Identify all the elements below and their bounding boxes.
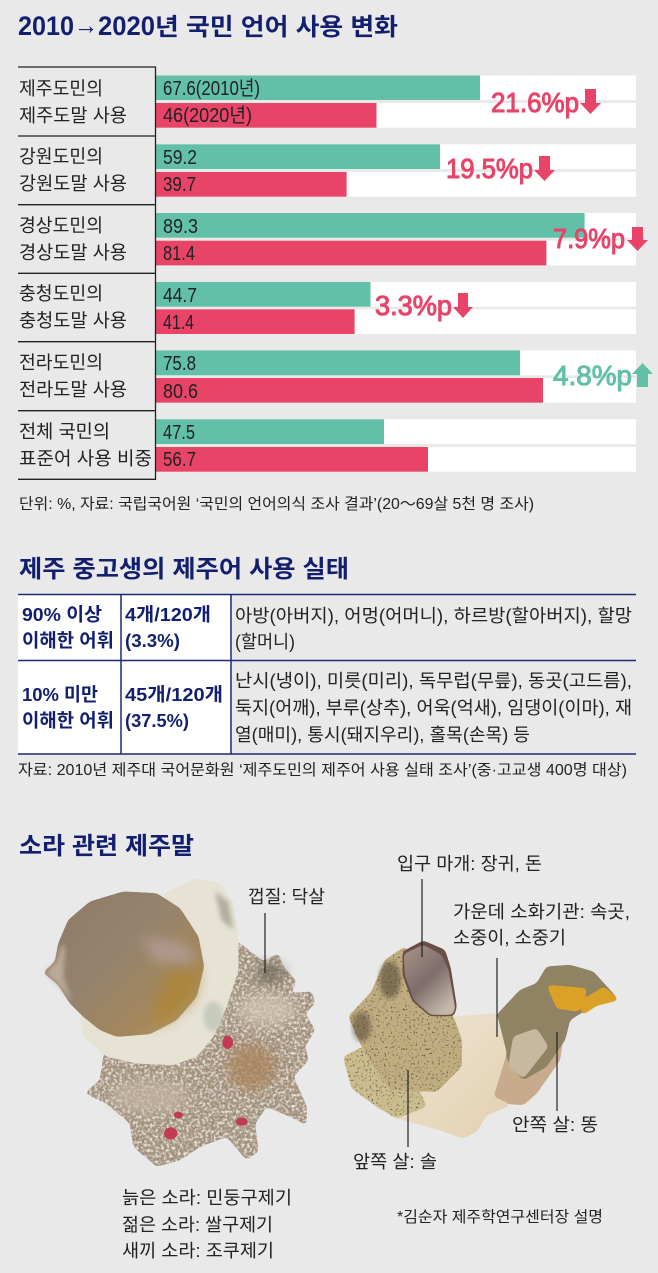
shell dark spines	[256, 963, 284, 983]
row labels: 전체 국민의	[19, 421, 110, 442]
gland piece	[497, 965, 618, 1080]
row: under 10%: 이해한 어휘	[22, 710, 114, 731]
label: front flesh: 앞쪽 살: 솔	[353, 1152, 437, 1172]
bar values: 75.8	[163, 353, 196, 375]
title: language use change: →	[74, 10, 98, 40]
red bars: 2020	[156, 103, 546, 472]
title: language use change: 2020	[98, 11, 155, 41]
title: language use change: 년 국민 언어 사용 변화	[155, 14, 398, 41]
label: shell	[248, 887, 325, 973]
bar track backgrounds	[156, 76, 636, 472]
bar values: 80.6	[163, 381, 198, 403]
gland orange	[547, 985, 619, 1017]
row: under 10%: 10% 미만	[22, 684, 98, 705]
label: digestive organ: 가운데 소화기관: 속곳,	[453, 902, 630, 922]
bar values: 81.4	[163, 243, 195, 265]
bar values: 59.2	[163, 147, 197, 169]
panel: bar chart	[18, 66, 653, 480]
bar values: 39.7	[163, 174, 196, 196]
label: inner flesh: 안쪽 살: 똥	[512, 1115, 598, 1135]
shell lip shade	[215, 892, 233, 930]
shell iridescence	[140, 937, 197, 963]
bar values: 44.7	[163, 285, 197, 307]
heading: conch words: 소라 관련 제주말	[19, 833, 194, 860]
shell inner glow	[150, 970, 200, 1027]
change callout: Jeolla: 4.8%p	[553, 360, 632, 391]
row: under 10%: 난시(냉이), 미릇(미리), 독무럽(무릎), 동곳(고드름),	[235, 671, 632, 691]
dark speckle left	[352, 1012, 371, 1042]
operculum inner	[404, 945, 455, 1015]
row: 90% or more: 아방(아버지), 어멍(어머니), 하르방(할아버지), 할망	[235, 606, 632, 626]
row: 90% or more: (할머니)	[235, 632, 295, 652]
shell light crust	[237, 993, 297, 1027]
shell pale left rim	[45, 945, 72, 1002]
change callout: Gangwon: 19.5%p	[446, 153, 533, 184]
dark speckle top	[379, 962, 401, 998]
row labels: 제주도말 사용	[19, 105, 127, 126]
row labels: 강원도말 사용	[19, 173, 127, 194]
row: under 10%: 둑지(어깨), 부루(상추), 어욱(억새), 임댕이(이마), 재	[235, 698, 632, 718]
title: language use change	[18, 10, 398, 41]
foot	[343, 1047, 427, 1118]
label: inner flesh	[512, 1032, 598, 1135]
row: 90% or more: (3.3%)	[125, 630, 180, 651]
row: 90% or more: 4개/120개	[125, 604, 211, 625]
row: under 10%: 열(매미), 통시(돼지우리), 홀목(손목) 등	[235, 725, 530, 745]
row labels: 제주도민의	[19, 78, 103, 99]
green bars: 2010	[156, 76, 585, 444]
illustration: conch flesh	[343, 941, 619, 1138]
bar values	[163, 77, 260, 471]
bar values: 47.5	[163, 422, 195, 444]
row labels: 경상도민의	[19, 215, 103, 236]
label: front flesh	[353, 1070, 437, 1172]
label: conch ages: 새끼 소라: 조쿠제기	[122, 1241, 274, 1261]
heading: Jeju students: 제주 중고생의 제주어 사용 실태	[19, 556, 349, 583]
shell outer rough body	[85, 930, 315, 1167]
bar values: 46(2020년)	[163, 104, 252, 127]
bar values: 89.3	[163, 216, 198, 238]
table source note: 자료: 2010년 제주대 국어문화원 ‘제주도민의 제주어 사용 실태 조사’(중·고교생 400명 대상)	[18, 761, 627, 779]
body	[348, 947, 462, 1092]
change callout: Chungcheong: 3.3%p	[375, 290, 452, 321]
chart source note: 단위: %, 자료: 국립국어원 ‘국민의 언어의식 조사 결과’(20～69살 5천 명 조사)	[19, 495, 534, 513]
row labels	[19, 78, 152, 469]
label: shell: 껍질: 닥살	[248, 887, 325, 907]
row labels: 충청도말 사용	[19, 310, 127, 331]
change callout: Jeju: 21.6%p	[491, 87, 579, 118]
row labels: 강원도민의	[19, 146, 103, 167]
row: 90% or more: 90% 이상	[22, 604, 102, 625]
shell pale lower patch	[110, 1080, 190, 1113]
label: digestive organ	[453, 902, 630, 1037]
credit note: *김순자 제주학연구센터장 설명	[397, 1208, 603, 1226]
title: language use change: 2010	[18, 11, 74, 41]
shell lip greenish shade	[203, 1002, 223, 1032]
light piece	[508, 1028, 548, 1078]
row labels: 충청도민의	[19, 283, 103, 304]
shell lip	[80, 878, 238, 1065]
shell warm patch	[227, 1043, 277, 1090]
illustration: conch shell	[43, 878, 315, 1167]
bar values: 56.7	[163, 449, 196, 471]
white flesh	[380, 1013, 512, 1138]
change callout: Gyeongsang: 7.9%p	[553, 223, 625, 254]
row: under 10%: (37.5%)	[125, 710, 189, 731]
row labels: 전라도민의	[19, 352, 103, 373]
bar values: 41.4	[163, 312, 194, 334]
row: 90% or more: 이해한 어휘	[22, 630, 114, 651]
bar values: 67.6(2010년)	[163, 77, 260, 100]
label: digestive organ: 소중이, 소중기	[453, 928, 566, 948]
row: under 10%: 45개/120개	[125, 684, 223, 705]
shell red marks	[164, 1036, 248, 1139]
label: conch ages: 늙은 소라: 민둥구제기	[122, 1188, 292, 1208]
row: under 10%	[22, 671, 632, 745]
label: conch ages: 젊은 소라: 쌀구제기	[122, 1215, 273, 1235]
row labels: 전라도말 사용	[19, 379, 127, 400]
label: operculum: 입구 마개: 장귀, 돈	[397, 854, 542, 874]
operculum	[403, 941, 457, 1016]
label: conch ages	[122, 1188, 292, 1261]
row labels: 경상도말 사용	[19, 242, 127, 263]
panel: vocabulary table	[18, 594, 636, 754]
shell aperture	[43, 892, 204, 1037]
lower tan piece	[487, 1037, 563, 1107]
row labels: 표준어 사용 비중	[19, 448, 152, 469]
row: 90% or more	[22, 604, 632, 652]
